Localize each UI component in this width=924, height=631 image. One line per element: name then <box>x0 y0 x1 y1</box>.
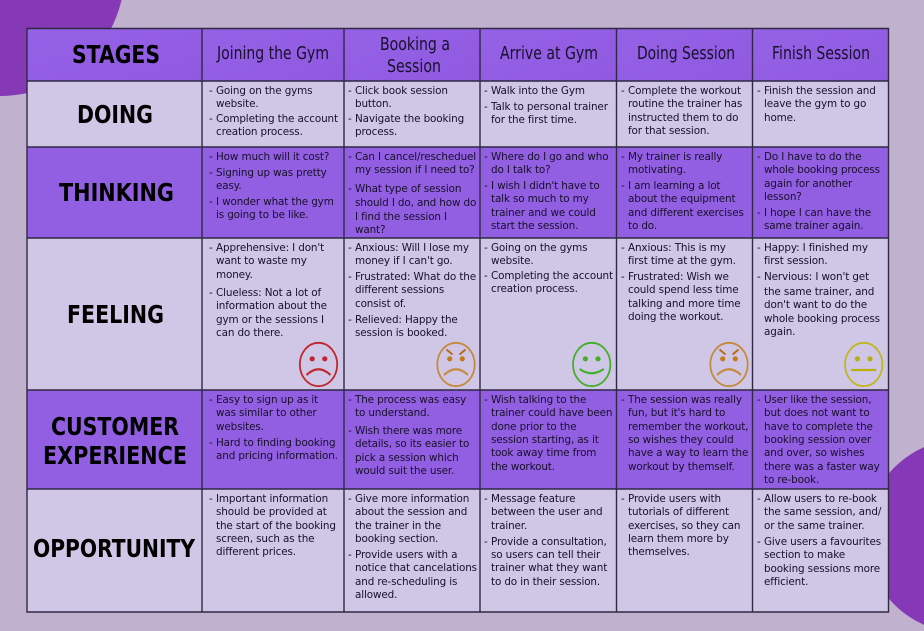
doing: arrive at gym: - <box>484 85 488 97</box>
opportunity: finish session: booking sessions more <box>764 563 880 575</box>
customer experience: finish session: - <box>757 394 761 406</box>
customer experience: doing session: The session was really <box>627 394 742 406</box>
opportunity: booking a session: - <box>348 493 352 505</box>
feeling: arrive at gym: - <box>484 270 488 282</box>
doing: joining the gym: website. <box>216 98 259 110</box>
opportunity: arrive at gym: trainer. <box>491 520 527 532</box>
feeling: booking a session: - <box>348 242 352 254</box>
feeling: arrive at gym: Completing the account <box>491 270 613 282</box>
opportunity: finish session: the same session, and/ <box>764 506 882 518</box>
thinking: arrive at gym: - <box>484 151 488 163</box>
doing: booking a session: Click book session <box>355 85 448 97</box>
thinking: booking a session: I find the session I <box>355 211 447 223</box>
row heading: customer experience: EXPERIENCE <box>43 441 187 470</box>
customer experience: finish session: to re-book. <box>764 474 819 486</box>
row: stages header <box>27 28 888 81</box>
doing: doing session: Complete the workout <box>628 85 741 97</box>
doing: joining the gym: creation process. <box>216 126 303 138</box>
opportunity: finish session: Give users a favourites <box>764 536 881 548</box>
doing: arrive at gym: - <box>484 101 488 113</box>
feeling: finish session: Happy: I finished my <box>764 242 868 254</box>
customer experience: finish session: there was a faster way <box>764 461 880 473</box>
doing: booking a session: Navigate the booking <box>355 113 464 125</box>
customer experience: joining the gym: websites. <box>216 421 264 433</box>
thinking: arrive at gym: talk so much to my <box>491 193 589 205</box>
stage: booking a session: Booking a <box>380 34 450 55</box>
feeling: booking a session: Anxious: Will I lose my <box>355 242 469 254</box>
opportunity: doing session: tutorials of different <box>628 506 729 518</box>
row heading: doing: DOING <box>77 100 153 129</box>
thinking: booking a session: Can I cancel/rescheduel <box>355 151 476 163</box>
doing: doing session: routine the trainer has <box>628 98 742 110</box>
row heading: thinking <box>27 147 202 238</box>
feeling: joining the gym: Apprehensive: I don't <box>216 242 324 254</box>
opportunity: booking a session: the trainer in the <box>355 520 441 532</box>
feeling: joining the gym: - <box>209 242 213 254</box>
thinking: doing session: - <box>621 151 625 163</box>
row: customer experience <box>27 390 888 489</box>
feeling: doing session: - <box>621 271 625 283</box>
customer experience: arrive at gym: trainer could have been <box>491 407 612 419</box>
row heading: customer experience <box>27 390 202 489</box>
thinking: booking a session: should I do, and how do <box>355 197 476 209</box>
opportunity: finish session: efficient. <box>764 576 808 588</box>
row heading: feeling: FEELING <box>67 300 164 329</box>
thinking: finish session: - <box>757 151 761 163</box>
customer experience: arrive at gym: done prior to the <box>491 421 576 433</box>
customer experience: finish session: have to complete the <box>764 421 873 433</box>
thinking: finish session <box>752 147 888 238</box>
feeling: booking a session: consist of. <box>355 298 406 310</box>
row: feeling <box>27 238 888 390</box>
opportunity: joining the gym: should be provided at <box>216 506 327 518</box>
opportunity: finish session: or the same trainer. <box>764 520 864 532</box>
opportunity: finish session: - <box>757 536 761 548</box>
thinking: joining the gym <box>202 147 344 238</box>
customer experience: booking a session: pick a session which <box>355 452 459 464</box>
customer experience: arrive at gym: Wish talking to the <box>491 394 586 406</box>
stage: finish session <box>752 28 888 81</box>
thinking: arrive at gym: - <box>484 180 488 192</box>
opportunity: arrive at gym: so users can tell their <box>491 549 601 561</box>
stage: doing session <box>616 28 752 81</box>
feeling: arrive at gym <box>480 238 616 390</box>
doing: doing session: instructed them to do <box>628 112 738 124</box>
feeling: booking a session <box>344 238 480 390</box>
feeling: finish session: the same trainer, and <box>764 286 874 298</box>
feeling: booking a session: Frustrated: What do the <box>355 271 476 283</box>
opportunity: doing session: - <box>621 493 625 505</box>
opportunity: arrive at gym <box>480 489 616 612</box>
opportunity: booking a session <box>344 489 480 612</box>
thinking: joining the gym: - <box>209 151 213 163</box>
opportunity: doing session <box>616 489 752 612</box>
customer experience: doing session: have a way to learn the <box>628 447 748 459</box>
icon: red sad face <box>300 343 337 386</box>
customer experience: joining the gym: - <box>209 437 213 449</box>
heading: stages <box>27 28 202 81</box>
opportunity: finish session: section to make <box>764 549 845 561</box>
customer experience: finish session <box>752 390 888 489</box>
feeling: arrive at gym: website. <box>491 255 534 267</box>
thinking: arrive at gym <box>480 147 616 238</box>
customer experience: joining the gym: Easy to sign up as it <box>216 394 318 406</box>
customer experience: booking a session: - <box>348 394 352 406</box>
decorative circle: bottom right <box>866 439 924 631</box>
thinking: joining the gym: is going to be like. <box>216 209 308 221</box>
feeling: arrive at gym: creation process. <box>491 283 578 295</box>
doing: arrive at gym: for the first time. <box>491 114 577 126</box>
decorative circle: top left <box>0 0 125 96</box>
opportunity: joining the gym: - <box>209 493 213 505</box>
doing: arrive at gym <box>480 81 616 147</box>
doing: joining the gym: - <box>209 85 213 97</box>
doing: booking a session: - <box>348 85 352 97</box>
thinking: doing session: My trainer is really <box>628 151 722 163</box>
thinking: booking a session: - <box>348 183 352 195</box>
feeling: arrive at gym: Going on the gyms <box>491 242 587 254</box>
opportunity: doing session: exercises, so they can <box>628 520 740 532</box>
thinking: doing session <box>616 147 752 238</box>
opportunity: booking a session: Provide users with a <box>355 549 457 561</box>
row heading: customer experience: CUSTOMER <box>51 412 179 441</box>
feeling: booking a session: - <box>348 314 352 326</box>
thinking: joining the gym: I wonder what the gym <box>216 196 334 208</box>
doing: joining the gym: Going on the gyms <box>216 85 312 97</box>
opportunity: doing session: themselves. <box>628 546 690 558</box>
customer experience: booking a session: - <box>348 425 352 437</box>
customer experience: booking a session: to understand. <box>355 407 430 419</box>
doing: booking a session <box>344 81 480 147</box>
feeling: finish session: first session. <box>764 255 828 267</box>
feeling: doing session: - <box>621 242 625 254</box>
customer experience: finish session: User like the session, <box>764 394 871 406</box>
thinking: joining the gym: How much will it cost? <box>216 151 329 163</box>
feeling: doing session: Frustrated: Wish we <box>628 271 729 283</box>
customer experience: booking a session <box>344 390 480 489</box>
feeling: joining the gym: Clueless: Not a lot of <box>216 287 321 299</box>
thinking: joining the gym: - <box>209 196 213 208</box>
opportunity: finish session: Allow users to re-book <box>764 493 877 505</box>
feeling: doing session: talking and more time <box>628 298 741 310</box>
opportunity: doing session: learn them more by <box>628 533 729 545</box>
icon: orange angry face <box>437 343 475 386</box>
doing: booking a session: - <box>348 113 352 125</box>
opportunity: joining the gym: the start of the booking <box>216 520 336 532</box>
feeling: booking a session: Relieved: Happy the <box>355 314 458 326</box>
thinking: booking a session: want? <box>355 224 385 236</box>
doing: doing session: for that session. <box>628 125 710 137</box>
stage: arrive at gym: Arrive at Gym <box>500 43 598 64</box>
thinking: finish session: Do I have to do the <box>764 151 861 163</box>
doing: finish session: home. <box>764 112 796 124</box>
customer experience: doing session: workout by themself. <box>628 461 735 473</box>
customer experience: joining the gym: Hard to finding booking <box>216 437 335 449</box>
opportunity: arrive at gym: trainer what they want <box>491 562 607 574</box>
customer experience: booking a session: would suit the user. <box>355 465 454 477</box>
row heading: thinking: THINKING <box>59 178 174 207</box>
feeling: booking a session: different sessions <box>355 284 444 296</box>
thinking: finish session: again for another <box>764 178 853 190</box>
thinking: arrive at gym: trainer and we could <box>491 207 596 219</box>
thinking: arrive at gym: do I talk to? <box>491 164 551 176</box>
opportunity: finish session: - <box>757 493 761 505</box>
feeling: doing session <box>616 238 752 390</box>
feeling: joining the gym: gym or the sessions I <box>216 314 324 326</box>
thinking: doing session: about the equipment <box>628 193 735 205</box>
thinking: finish session: whole booking process <box>764 164 880 176</box>
customer experience: doing session: remember the workout, <box>628 421 748 433</box>
feeling: booking a session: session is booked. <box>355 327 447 339</box>
thinking: joining the gym: easy. <box>216 180 242 192</box>
opportunity: booking a session: - <box>348 549 352 561</box>
thinking: arrive at gym: I wish I didn't have to <box>491 180 600 192</box>
opportunity: doing session: Provide users with <box>628 493 721 505</box>
customer experience: booking a session: The process was easy <box>354 394 466 406</box>
doing: arrive at gym: Talk to personal trainer <box>490 101 609 113</box>
feeling: doing session: could spend less time <box>628 284 738 296</box>
customer experience: joining the gym <box>202 390 344 489</box>
stage: arrive at gym <box>480 28 616 81</box>
customer experience: booking a session: Wish there was more <box>355 425 462 437</box>
feeling: joining the gym: money. <box>216 269 253 281</box>
thinking: booking a session: my session if I need to? <box>355 164 475 176</box>
opportunity: joining the gym: Important information <box>216 493 328 505</box>
icon: yellow neutral face <box>845 343 882 386</box>
thinking: joining the gym: Signing up was pretty <box>216 167 327 179</box>
feeling: finish session: whole booking process <box>764 313 880 325</box>
row: opportunity <box>27 489 888 612</box>
opportunity: joining the gym: different prices. <box>216 546 296 558</box>
thinking: finish session: lesson? <box>764 191 802 203</box>
doing: finish session: Finish the session and <box>764 85 876 97</box>
stage: booking a session <box>344 28 480 81</box>
customer experience: doing session: fun, but it's hard to <box>628 407 725 419</box>
customer experience: finish session: booking session over <box>764 434 872 446</box>
customer experience: arrive at gym: took away time from <box>491 447 596 459</box>
stage: joining the gym: Joining the Gym <box>216 43 329 64</box>
thinking: booking a session: - <box>348 151 352 163</box>
customer experience: joining the gym: - <box>209 394 213 406</box>
opportunity: booking a session: notice that cancelations <box>355 562 477 574</box>
stage: finish session: Finish Session <box>772 43 870 64</box>
doing: finish session: - <box>757 85 761 97</box>
doing: finish session: leave the gym to go <box>764 98 866 110</box>
feeling: finish session <box>752 238 888 390</box>
thinking: finish session: same trainer again. <box>764 220 863 232</box>
opportunity: booking a session: about the session and <box>355 506 467 518</box>
feeling: doing session: doing the workout. <box>628 311 723 323</box>
feeling: joining the gym: information about the <box>216 300 327 312</box>
thinking: booking a session: What type of session <box>355 183 461 195</box>
customer experience: arrive at gym: - <box>484 394 488 406</box>
opportunity: arrive at gym: Message feature <box>491 493 575 505</box>
thinking: arrive at gym: start the session. <box>491 220 578 232</box>
customer experience: finish session: and over, so wishes <box>764 447 864 459</box>
doing: arrive at gym: Walk into the Gym <box>491 85 585 97</box>
row: thinking <box>27 147 888 238</box>
opportunity: arrive at gym: - <box>484 536 488 548</box>
thinking: finish session: I hope I can have the <box>764 207 871 219</box>
opportunity: joining the gym <box>202 489 344 612</box>
opportunity: arrive at gym: - <box>484 493 488 505</box>
heading: stages: STAGES <box>72 40 160 69</box>
doing: doing session <box>616 81 752 147</box>
feeling: joining the gym: want to waste my <box>216 255 307 267</box>
thinking: doing session: to do. <box>628 220 657 232</box>
opportunity: booking a session: booking section. <box>355 533 438 545</box>
icon: orange angry face <box>710 343 748 386</box>
feeling: arrive at gym: - <box>484 242 488 254</box>
customer experience: doing session: so wishes they could <box>628 434 734 446</box>
customer experience: joining the gym: and pricing information. <box>216 450 338 462</box>
stage: booking a session: Session <box>387 56 441 77</box>
customer experience: booking a session: details, so its easier to <box>355 438 469 450</box>
feeling: finish session: - <box>757 242 761 254</box>
feeling: doing session: first time at the gym. <box>628 255 736 267</box>
thinking: booking a session <box>344 147 480 238</box>
feeling: joining the gym: - <box>209 287 213 299</box>
doing: booking a session: button. <box>355 98 392 110</box>
feeling: finish session: - <box>757 271 761 283</box>
doing: joining the gym: Completing the account <box>216 113 338 125</box>
customer experience: doing session: - <box>621 394 625 406</box>
opportunity: arrive at gym: to do in their session. <box>491 576 600 588</box>
doing: finish session <box>752 81 888 147</box>
customer experience: arrive at gym: the workout. <box>491 461 555 473</box>
thinking: doing session: and different exercises <box>628 207 744 219</box>
feeling: finish session: again. <box>764 326 795 338</box>
thinking: joining the gym: - <box>209 167 213 179</box>
opportunity: booking a session: and re-scheduling is <box>355 576 457 588</box>
opportunity: finish session <box>752 489 888 612</box>
thinking: doing session: motivating. <box>628 164 686 176</box>
doing: booking a session: process. <box>355 126 397 138</box>
feeling: booking a session: - <box>348 271 352 283</box>
thinking: arrive at gym: Where do I go and who <box>491 151 608 163</box>
thinking: finish session: - <box>757 207 761 219</box>
row heading: opportunity <box>27 489 202 612</box>
thinking: doing session: - <box>621 180 625 192</box>
opportunity: arrive at gym: Provide a consultation, <box>491 536 607 548</box>
feeling: finish session: don't want to do the <box>764 299 867 311</box>
doing: doing session: - <box>621 85 625 97</box>
opportunity: joining the gym: screen, such as the <box>216 533 314 545</box>
customer experience: arrive at gym: session starting, as it <box>491 434 599 446</box>
stage: joining the gym <box>202 28 344 81</box>
row heading: doing <box>27 81 202 147</box>
opportunity: arrive at gym: between the user and <box>491 506 603 518</box>
feeling: joining the gym: can do there. <box>216 327 283 339</box>
stage: doing session: Doing Session <box>637 43 735 64</box>
row: doing <box>27 81 888 147</box>
feeling: finish session: Nervious: I won't get <box>764 271 869 283</box>
customer experience: finish session: but does not want to <box>764 407 870 419</box>
row heading: feeling <box>27 238 202 390</box>
customer experience: arrive at gym <box>480 390 616 489</box>
opportunity: booking a session: Give more information <box>355 493 469 505</box>
doing: joining the gym: - <box>209 113 213 125</box>
opportunity: booking a session: allowed. <box>355 589 397 601</box>
thinking: doing session: I am learning a lot <box>628 180 720 192</box>
customer experience: joining the gym: was similar to other <box>216 407 317 419</box>
row heading: opportunity: OPPORTUNITY <box>33 534 195 563</box>
icon: green smiling face <box>573 343 610 386</box>
feeling: doing session: Anxious: This is my <box>628 242 726 254</box>
customer experience: doing session <box>616 390 752 489</box>
doing: joining the gym <box>202 81 344 147</box>
feeling: booking a session: money if I can't go. <box>355 255 452 267</box>
feeling: joining the gym <box>202 238 344 390</box>
